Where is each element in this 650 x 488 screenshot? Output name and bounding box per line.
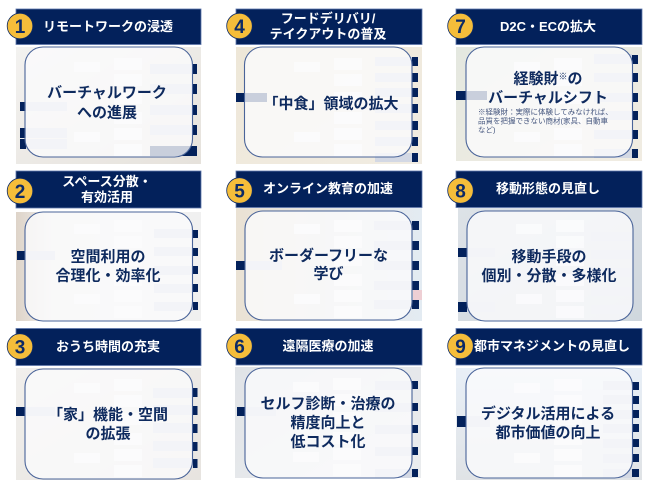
header 5: オンライン教育の加速 — [263, 181, 393, 196]
card 3: home time — [7, 328, 201, 480]
callout 6: セルフ診断・治療の — [260, 394, 396, 412]
number badge 6: 6 — [234, 337, 245, 358]
number badge 3: 3 — [15, 338, 25, 358]
number badge 7: 7 — [455, 17, 466, 38]
callout 9: 都市価値の向上 — [495, 424, 601, 442]
callout 7 — [466, 47, 632, 157]
header 2 — [16, 171, 201, 208]
callout 5: ボーダーフリーな — [269, 246, 388, 264]
header 1: リモートワークの浸透 — [43, 19, 173, 34]
callout 3: 「家」機能・空間 — [48, 406, 168, 424]
number badge 9 — [448, 333, 473, 359]
callout 6: 低コスト化 — [290, 434, 366, 450]
number badge 5: 5 — [234, 182, 245, 202]
callout 7: ※ — [558, 72, 568, 82]
callout 9 — [466, 368, 632, 478]
card 5: online education — [227, 171, 422, 321]
header 3 — [16, 328, 201, 366]
card 9: city management — [448, 328, 642, 480]
header 7: D2C・ECの拡大 — [500, 19, 596, 34]
number badge 4 — [227, 13, 252, 39]
number badge 1 — [7, 13, 33, 39]
callout 2: 合理化・効率化 — [55, 266, 161, 284]
callout 4 — [244, 47, 412, 157]
callout 8 — [467, 211, 633, 321]
callout 1: への進展 — [77, 104, 137, 122]
number badge 9: 9 — [455, 337, 466, 358]
callout 5 — [245, 211, 412, 320]
callout 8: 移動手段の — [511, 248, 587, 266]
header 9: 都市マネジメントの見直し — [474, 338, 630, 354]
callout 2: 空間利用の — [70, 248, 146, 266]
callout 1 — [25, 47, 192, 157]
header 2: スペース分散・ — [62, 174, 152, 189]
header 5 — [236, 171, 422, 208]
number badge 1: 1 — [15, 17, 26, 38]
callout 7: 品質を把握できない商材(家具、自動車 — [478, 116, 608, 126]
callout 9: デジタル活用による — [481, 404, 615, 422]
number badge 4: 4 — [234, 17, 245, 38]
header 6: 遠隔医療の加速 — [282, 338, 374, 354]
card 1: remote work — [7, 9, 201, 164]
callout 7: バーチャルシフト — [488, 90, 608, 106]
callout 7: の — [568, 70, 583, 88]
header 8 — [456, 171, 642, 208]
number badge 2: 2 — [15, 182, 25, 203]
callout 5: 学び — [313, 264, 344, 282]
number badge 6 — [227, 333, 252, 359]
header 8: 移動形態の見直し — [496, 181, 600, 196]
card 8: mobility — [448, 171, 642, 321]
number badge 5 — [227, 178, 252, 203]
card 4: food delivery — [227, 9, 422, 164]
callout 3: の拡張 — [85, 424, 131, 442]
callout 7: ※経験財：実際に体験してみなければ、 — [478, 106, 613, 116]
header 1 — [16, 9, 201, 44]
callout 6 — [245, 368, 412, 478]
callout 7: 経験財 — [513, 70, 558, 88]
header 9 — [456, 328, 642, 365]
card 6: telemedicine — [227, 328, 422, 478]
background slide 2 — [16, 212, 201, 321]
background slide 1 — [16, 47, 201, 164]
number badge 8 — [448, 178, 473, 203]
number badge 7 — [448, 13, 473, 39]
header 3: おうち時間の充実 — [56, 339, 160, 354]
header 4 — [236, 9, 422, 44]
background slide 5 — [236, 208, 422, 321]
background slide 9 — [456, 368, 642, 480]
header 4: テイクアウトの普及 — [270, 26, 386, 42]
background slide 4 — [236, 47, 422, 164]
header 7 — [456, 9, 642, 44]
callout 1: バーチャルワーク — [47, 84, 167, 102]
callout 7: など) — [478, 126, 496, 134]
background slide 3 — [16, 368, 201, 480]
background slide 7 — [456, 47, 642, 161]
header 6 — [236, 328, 422, 365]
header 2: 有効活用 — [81, 190, 133, 204]
number badge 2 — [7, 178, 33, 204]
callout 3 — [25, 369, 192, 479]
background slide 6 — [235, 367, 421, 478]
callout 6: 精度向上と — [290, 414, 366, 432]
callout 4: 「中食」領域の拡大 — [263, 94, 399, 112]
card 2: space distribution — [7, 171, 201, 321]
card 7: D2C and EC — [448, 9, 642, 161]
number badge 3 — [7, 334, 33, 359]
background slide 8 — [458, 208, 642, 321]
number badge 8: 8 — [455, 182, 466, 202]
callout 2 — [25, 212, 192, 321]
callout 8: 個別・分散・多様化 — [481, 266, 617, 284]
header 4: フードデリバリ/ — [281, 11, 376, 26]
